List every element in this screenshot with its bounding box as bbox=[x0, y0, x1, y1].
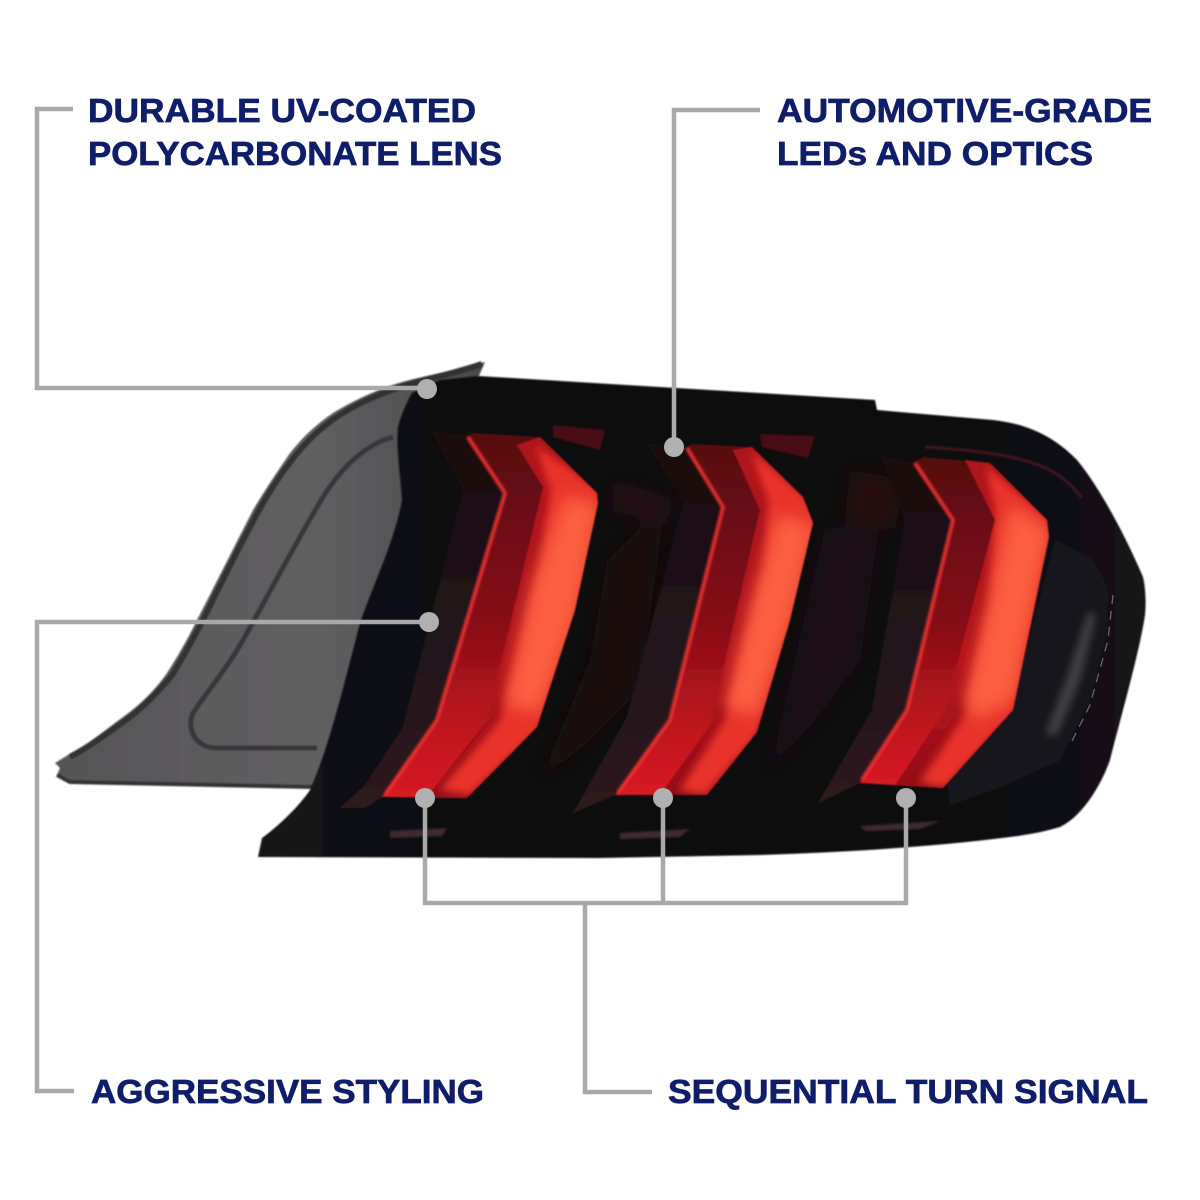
label: aggressive styling: AGGRESSIVE STYLING bbox=[91, 1073, 484, 1110]
dashed lens edge bbox=[1070, 595, 1113, 745]
gray mounting flange bbox=[55, 362, 485, 787]
thin light line bbox=[862, 463, 953, 780]
infographic: tail light features bbox=[34, 98, 1151, 1110]
label: durable UV-coated polycarbonate lens: POLYCARBONATE LENS bbox=[88, 135, 502, 172]
label: durable UV-coated polycarbonate lens bbox=[88, 92, 502, 172]
upper lens edge glow bbox=[925, 447, 1082, 498]
bright outer band bbox=[895, 460, 1049, 788]
dim reflections between chevrons bbox=[540, 470, 905, 780]
thin light line bbox=[385, 437, 505, 795]
bright outer band bbox=[660, 447, 813, 795]
red and orange glow bbox=[440, 445, 600, 795]
lens reflection highlight bbox=[1045, 612, 1096, 735]
chevron light 3 bbox=[818, 455, 1050, 803]
smoked area right of chevrons bbox=[947, 540, 1108, 805]
red glimmers at top bbox=[553, 425, 815, 458]
thin light line bbox=[618, 448, 723, 793]
callout: LEDs and optics leader bbox=[664, 110, 760, 457]
smoked surround bbox=[818, 455, 953, 803]
red and orange glow bbox=[920, 465, 1050, 788]
callout: durable lens leader bbox=[37, 109, 437, 399]
label: automotive-grade LEDs and optics: LEDs AND OPTICS bbox=[777, 135, 1093, 172]
red and orange glow bbox=[680, 450, 815, 795]
dark red inner band bbox=[382, 433, 598, 798]
chevron light 1 bbox=[340, 430, 600, 808]
chevron light 2 bbox=[573, 443, 815, 813]
label: automotive-grade LEDs and optics: AUTOMOTIVE-GRADE bbox=[777, 92, 1152, 129]
smoked surround bbox=[340, 430, 505, 808]
black housing bbox=[258, 376, 1146, 858]
bright outer band bbox=[427, 437, 598, 798]
callout: aggressive styling leader bbox=[37, 612, 439, 1091]
label: durable UV-coated polycarbonate lens: DURABLE UV-COATED bbox=[88, 92, 476, 129]
callout: sequential turn signal leader bbox=[415, 788, 916, 1092]
smoked surround bbox=[573, 443, 723, 813]
dark red inner band bbox=[615, 444, 813, 795]
bottom reflections bbox=[390, 821, 940, 839]
tail light assembly bbox=[55, 362, 1146, 858]
label: sequential turn signal: SEQUENTIAL TURN SIGNAL bbox=[668, 1073, 1148, 1110]
dark red inner band bbox=[860, 457, 1049, 788]
label: automotive-grade LEDs and optics bbox=[777, 92, 1152, 172]
